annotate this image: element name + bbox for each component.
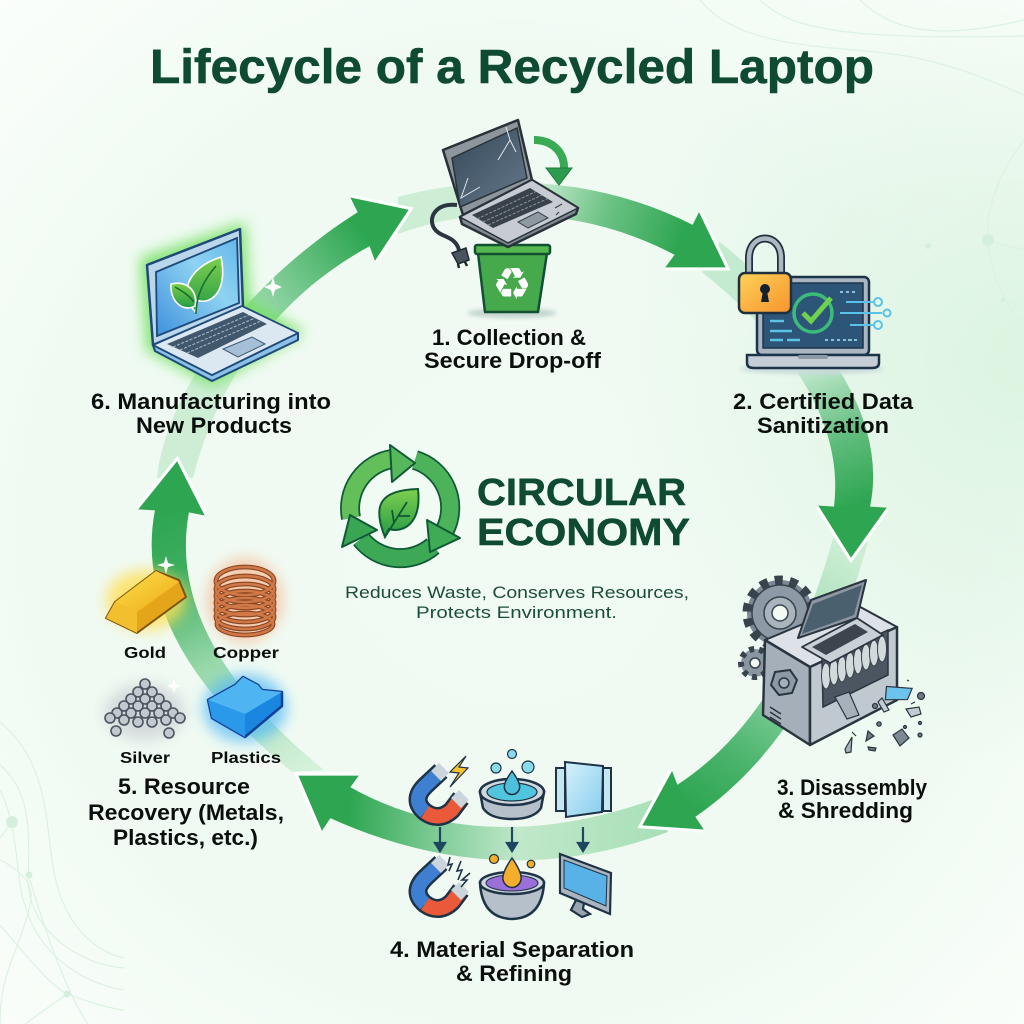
icon: recycling bin — [467, 245, 557, 318]
label: step 1 — [424, 325, 602, 373]
icon: refining bowl — [480, 854, 544, 919]
icon: new laptop with leaves — [140, 222, 305, 386]
arrow tail: start of step 1 arc — [398, 183, 500, 234]
arrow: step 6 to step 1 — [157, 198, 408, 478]
label: step 6: 6. Manufacturing into — [91, 389, 331, 414]
icon: twin leaves — [171, 257, 223, 314]
icon: water bowl — [480, 750, 544, 819]
label: gold: Gold — [124, 645, 166, 662]
label: step 5: Recovery (Metals, — [88, 800, 284, 825]
text: circular economy description: Protects Environment. — [416, 603, 617, 622]
label: step 3: & Shredding — [778, 798, 913, 823]
icon: broken laptop over recycling bin — [432, 120, 578, 318]
icon: down arrows — [435, 827, 588, 851]
label: step 2: Sanitization — [757, 413, 889, 438]
heading: circular economy — [477, 472, 690, 554]
label: step 1: Secure Drop-off — [424, 348, 602, 373]
label: plastics: Plastics — [211, 750, 281, 767]
icon: silver beads — [105, 679, 185, 740]
icon: magnet bottom — [418, 857, 470, 909]
label: step 2: 2. Certified Data — [733, 389, 914, 414]
arrow: step 3 to step 4 — [643, 538, 868, 829]
icon: check circle — [794, 294, 832, 332]
icon: monitor — [560, 854, 611, 917]
icon: shredded debris — [835, 680, 924, 753]
label: step 2 — [733, 389, 914, 438]
heading: circular economy: ECONOMY — [477, 512, 690, 554]
label: step 5 — [88, 774, 284, 850]
title: Lifecycle of a Recycled Laptop — [150, 41, 874, 94]
label: step 3: 3. Disassembly — [777, 775, 928, 800]
icon: leaf — [379, 489, 419, 537]
icon: recycling bin: ♻ — [492, 259, 532, 310]
icon: power cable — [432, 205, 469, 268]
label: step 5: Plastics, etc.) — [113, 825, 258, 850]
icon: copper coil — [207, 558, 283, 642]
icon: plastic block — [203, 674, 287, 742]
label: silver: Silver — [120, 750, 170, 767]
icon: padlock and laptop data sanitization — [739, 238, 890, 374]
label: step 1: 1. Collection & — [432, 325, 586, 350]
icon: gold bar — [106, 556, 186, 633]
label: step 4: & Refining — [456, 961, 572, 986]
arrow: step 2 to step 3 — [702, 242, 886, 557]
icon: glass panels — [556, 762, 611, 817]
label: step 4: 4. Material Separation — [390, 937, 634, 962]
icon: circular recycle logo — [342, 445, 460, 558]
arrow: step 1 to step 2 — [490, 183, 725, 267]
text: circular economy description — [345, 583, 689, 622]
icons: material separation and refining — [418, 750, 611, 919]
icon: shredder machine — [741, 580, 924, 753]
label: step 6 — [91, 389, 331, 438]
text: circular economy description: Reduces Waste, Conserves Resources, — [345, 583, 689, 602]
label: step 6: New Products — [136, 413, 292, 438]
label: copper: Copper — [213, 645, 279, 662]
icon: magnet top — [418, 756, 468, 817]
heading: circular economy: CIRCULAR — [477, 472, 686, 514]
icon: padlock — [739, 238, 791, 313]
icon: green drop-in arrow — [534, 140, 572, 185]
arrow: step 5 to step 6 — [139, 462, 324, 772]
icon: gears — [741, 580, 813, 677]
label: step 4 — [390, 937, 634, 986]
label: step 3 — [777, 775, 928, 823]
label: step 5: 5. Resource — [118, 774, 250, 799]
arrow: step 4 to step 5 — [299, 776, 668, 860]
icon: sparkles — [264, 277, 282, 297]
